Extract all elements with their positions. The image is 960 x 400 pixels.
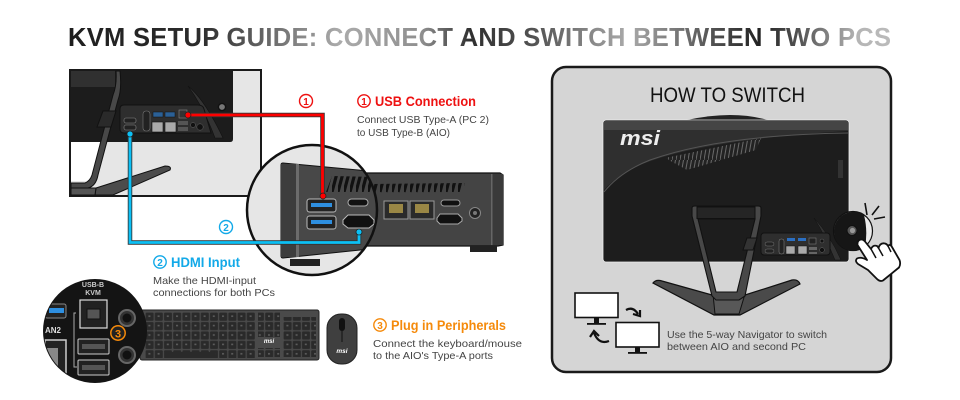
text: USB Connection: USB Connection	[375, 94, 476, 109]
text: navigator instructions: between AIO and second PC	[667, 342, 806, 353]
cable clip	[97, 111, 116, 127]
USB ports	[307, 199, 336, 229]
arrow: back to first monitor	[590, 331, 609, 342]
text: HDMI Input: Make the HDMI-input	[153, 275, 256, 287]
magnifier: peripheral ports: KVM	[85, 290, 101, 297]
AIO stand center	[713, 294, 745, 314]
rear port panel	[761, 233, 830, 255]
text: Plug in Peripherals: Plug in Peripherals	[391, 318, 506, 333]
LAN ports	[384, 201, 434, 219]
marker 3: 3	[115, 328, 121, 340]
cable 2: HDMI (blue)	[127, 131, 362, 242]
text: HDMI Input: 2	[157, 258, 163, 269]
panel: how to switch	[552, 67, 900, 372]
text: HDMI Input: connections for both PCs	[153, 287, 275, 299]
text: USB Connection: to USB Type-B (AIO)	[357, 127, 450, 139]
mouse: msi	[336, 348, 348, 355]
magnifier: PC ports	[247, 145, 380, 275]
USB-B port	[80, 300, 107, 328]
magnifier: peripheral ports: AN2	[45, 326, 62, 335]
text: navigator instructions: Use the 5-way Navigator to switch	[667, 330, 827, 341]
AIO stand	[692, 206, 761, 300]
icon: monitor 2	[616, 322, 659, 354]
text: Plug in Peripherals: to the AIO's Type-A ports	[373, 350, 493, 362]
AIO stand base	[653, 280, 800, 315]
cable 1: USB (red)	[185, 112, 326, 199]
marker 2: 2	[223, 223, 229, 234]
text: USB Connection	[357, 94, 489, 139]
marker 1: 1	[303, 97, 309, 108]
mouse	[327, 314, 357, 364]
text: USB Connection: 1	[361, 97, 367, 108]
KVM setup infographic	[43, 28, 902, 383]
msi logo: msi	[620, 128, 661, 150]
heading: how to switch: HOW TO SWITCH	[650, 84, 805, 107]
text: HDMI Input	[153, 255, 275, 299]
text: Plug in Peripherals: Connect the keyboard/mouse	[373, 338, 522, 350]
AIO stand leg	[71, 71, 121, 188]
marker 1	[300, 94, 312, 108]
arrow: to second monitor	[626, 309, 640, 316]
text: Plug in Peripherals: 3	[377, 321, 383, 332]
text: HDMI Input: HDMI Input	[171, 255, 240, 270]
icon: pointing hand	[856, 239, 900, 281]
text: navigator instructions	[667, 330, 827, 353]
keyboard	[140, 310, 319, 360]
icon: monitor 1	[575, 293, 618, 325]
keyboard: msi	[264, 339, 274, 345]
mini PC	[360, 173, 503, 252]
AIO stand base	[95, 166, 170, 195]
icon: click sparks	[865, 203, 885, 219]
magnifier: peripheral ports: USB-B	[82, 282, 104, 289]
rear port panel	[120, 105, 211, 133]
callout: navigator button	[834, 212, 872, 251]
text: USB Connection: Connect USB Type-A (PC 2)	[357, 114, 489, 126]
USB-A ports	[78, 339, 109, 375]
AIO back view	[603, 115, 849, 262]
magnifier: peripheral ports	[43, 279, 147, 383]
keyboard space bar	[165, 352, 215, 358]
marker 2	[220, 220, 232, 234]
text: Plug in Peripherals	[373, 318, 522, 362]
audio jacks	[119, 310, 135, 363]
panel: AIO rear close-up	[70, 70, 261, 196]
title: KVM SETUP GUIDE: CONNECT AND SWITCH BETWEEN TWO PCS	[68, 24, 891, 52]
